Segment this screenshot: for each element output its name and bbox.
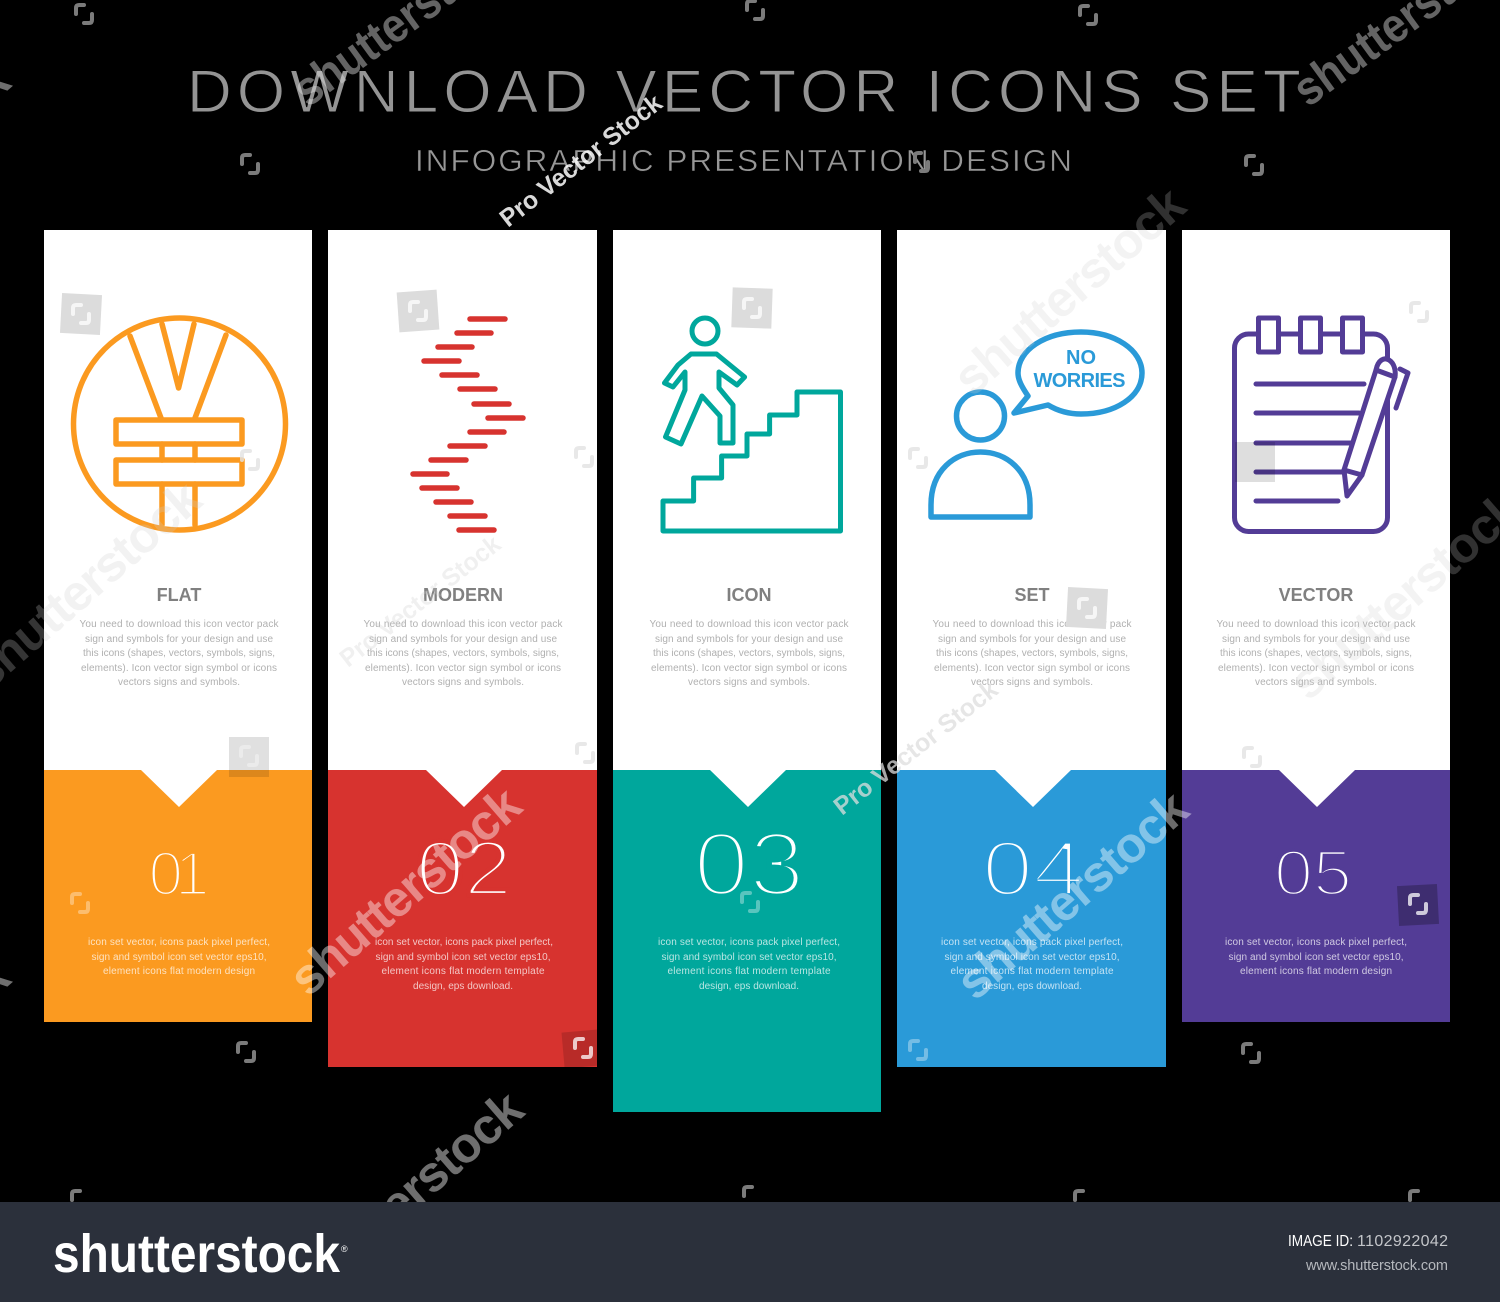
speech bubble text — [1034, 347, 1126, 392]
panel: vector — [1182, 230, 1450, 1022]
footer text: vector: element icons flat modern design — [1240, 966, 1392, 977]
panel: flat — [44, 230, 312, 1022]
description: vector: You need to download this icon vector pack — [1216, 619, 1416, 630]
image number: 1102922042 — [1357, 1233, 1448, 1250]
subtitle: INFOGRAPHIC PRESENTATION DESIGN — [415, 143, 1074, 178]
description: icon: You need to download this icon vector pack — [650, 619, 850, 630]
heading: icon: ICON — [726, 585, 772, 605]
description: modern: elements). Icon vector sign symbol or icons — [365, 663, 561, 674]
description: vector: this icons (shapes, vectors, symbols, signs, — [1220, 648, 1412, 659]
number 02: 02 — [416, 824, 512, 912]
footer text: flat: icon set vector, icons pack pixel perfect, — [88, 937, 270, 948]
footer text: modern — [375, 937, 553, 992]
number 05: 05 — [1274, 837, 1352, 909]
heading: flat: FLAT — [157, 585, 201, 605]
footer text: modern: icon set vector, icons pack pixel perfect, — [375, 937, 553, 948]
footer text: vector — [1225, 937, 1407, 977]
description: vector: elements). Icon vector sign symbol or icons — [1218, 663, 1414, 674]
website: www.shutterstock.com — [1305, 1258, 1448, 1274]
description: vector: sign and symbols for your design and use — [1222, 634, 1410, 645]
icon: person with speech bubble — [931, 332, 1142, 517]
footer text: vector: icon set vector, icons pack pixel perfect, — [1225, 937, 1407, 948]
description: modern: vectors signs and symbols. — [402, 677, 524, 688]
watermark text overlays: shutterstock — [278, 776, 532, 1006]
footer text: modern: element icons flat modern template — [382, 966, 545, 977]
watermark text overlays: Pro Vector Stock — [828, 675, 1003, 821]
footer text: modern: sign and symbol icon set vector eps10, — [376, 952, 550, 963]
image id: IMAGE ID: — [1288, 1233, 1353, 1250]
footer text: set: sign and symbol icon set vector eps10, — [944, 952, 1120, 963]
footer text: flat: sign and symbol icon set vector eps10, — [92, 952, 266, 963]
description: set — [932, 619, 1132, 688]
footer text: icon: sign and symbol icon set vector eps10, — [662, 952, 836, 963]
description: modern: sign and symbols for your design and use — [369, 634, 557, 645]
description: icon — [650, 619, 850, 688]
description: flat: elements). Icon vector sign symbol or icons — [81, 663, 277, 674]
description: icon: this icons (shapes, vectors, symbols, signs, — [653, 648, 845, 659]
watermark text overlays: Pro Vector Stock — [494, 89, 668, 233]
heading: modern: MODERN — [423, 585, 503, 605]
description: icon: elements). Icon vector sign symbol or icons — [651, 663, 847, 674]
icon: yen coin — [74, 318, 286, 530]
number 03: 03 — [694, 815, 804, 915]
icon: notepad and pen — [1234, 318, 1408, 532]
description: modern: this icons (shapes, vectors, symbols, signs, — [367, 648, 559, 659]
footer text: icon — [658, 937, 840, 992]
description: flat: this icons (shapes, vectors, symbols, signs, — [83, 648, 275, 659]
description: flat: You need to download this icon vector pack — [80, 619, 280, 630]
description: set: vectors signs and symbols. — [971, 677, 1093, 688]
icon: red dashes — [413, 319, 523, 530]
footer logo: shutterstock — [53, 1224, 341, 1284]
footer bar — [0, 1202, 1500, 1302]
footer text: set — [941, 937, 1123, 992]
icon: man climbing stairs — [663, 318, 840, 531]
description: icon: sign and symbols for your design and use — [655, 634, 843, 645]
description: icon: vectors signs and symbols. — [688, 677, 810, 688]
watermark text overlays: shutterstock — [942, 176, 1196, 406]
description: flat — [80, 619, 280, 688]
heading: vector: VECTOR — [1279, 585, 1353, 605]
description: flat: sign and symbols for your design and use — [85, 634, 273, 645]
title: DOWNLOAD VECTOR ICONS SET — [187, 58, 1306, 125]
panel: modern — [328, 230, 597, 1067]
footer text: vector: sign and symbol icon set vector eps10, — [1228, 952, 1404, 963]
footer text: icon: element icons flat modern template — [668, 966, 831, 977]
footer text: set: icon set vector, icons pack pixel perfect, — [941, 937, 1123, 948]
description: modern: You need to download this icon vector pack — [364, 619, 564, 630]
description: vector: vectors signs and symbols. — [1255, 677, 1377, 688]
watermark text overlays: shutterstock — [945, 780, 1199, 1010]
footer text: flat — [88, 937, 270, 977]
description: vector — [1216, 619, 1416, 688]
footer text: icon: icon set vector, icons pack pixel perfect, — [658, 937, 840, 948]
footer text: modern: design, eps download. — [413, 981, 513, 992]
registered mark: ® — [341, 1244, 348, 1254]
heading: set: SET — [1014, 585, 1050, 605]
footer text: flat: element icons flat modern design — [103, 966, 255, 977]
panel: set — [897, 230, 1166, 1067]
number 04: 04 — [982, 824, 1084, 912]
footer text: set: design, eps download. — [982, 981, 1082, 992]
description: flat: vectors signs and symbols. — [118, 677, 240, 688]
speech bubble text: NO — [1066, 347, 1096, 369]
description: set: elements). Icon vector sign symbol or icons — [934, 663, 1130, 674]
footer text: icon: design, eps download. — [699, 981, 799, 992]
number 01: 01 — [148, 840, 210, 909]
description: set: sign and symbols for your design and use — [938, 634, 1126, 645]
description: modern — [364, 619, 564, 688]
description: set: this icons (shapes, vectors, symbols, signs, — [936, 648, 1128, 659]
watermark text overlays: Pro Vector Stock — [334, 530, 506, 673]
panel: icon — [613, 230, 881, 1112]
speech bubble text: WORRIES — [1034, 370, 1126, 392]
description: set: You need to download this icon vector pack — [932, 619, 1132, 630]
footer text: set: element icons flat modern template — [950, 966, 1114, 977]
